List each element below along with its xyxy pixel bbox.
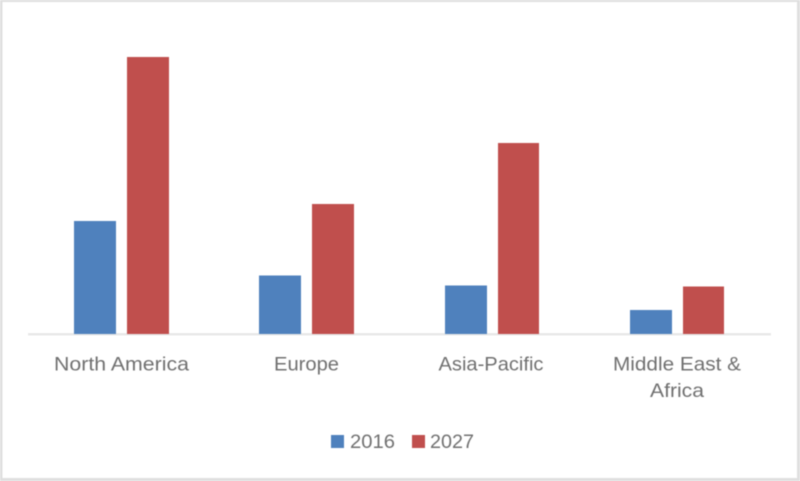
bars: Middle East & Africa — [630, 286, 724, 334]
category label: North America: North America — [54, 354, 189, 376]
category label: Middle East & Africa — [613, 354, 741, 402]
category label: Asia-Pacific: Asia-Pacific — [438, 354, 544, 376]
legend — [331, 431, 474, 453]
axis baseline — [28, 333, 771, 336]
category label: Europe: Europe — [274, 354, 339, 376]
category label: Middle East & Africa: Africa — [650, 380, 704, 402]
bars: Asia-Pacific — [445, 143, 539, 334]
legend item: 2016 — [331, 431, 395, 453]
legend item: 2027 — [412, 431, 474, 453]
bars: Europe — [259, 204, 354, 334]
legend item: 2027: 2027 — [430, 431, 474, 453]
bars: North America — [74, 57, 169, 334]
category label: Middle East & Africa: Middle East & — [613, 354, 741, 376]
legend item: 2016: 2016 — [350, 431, 395, 453]
